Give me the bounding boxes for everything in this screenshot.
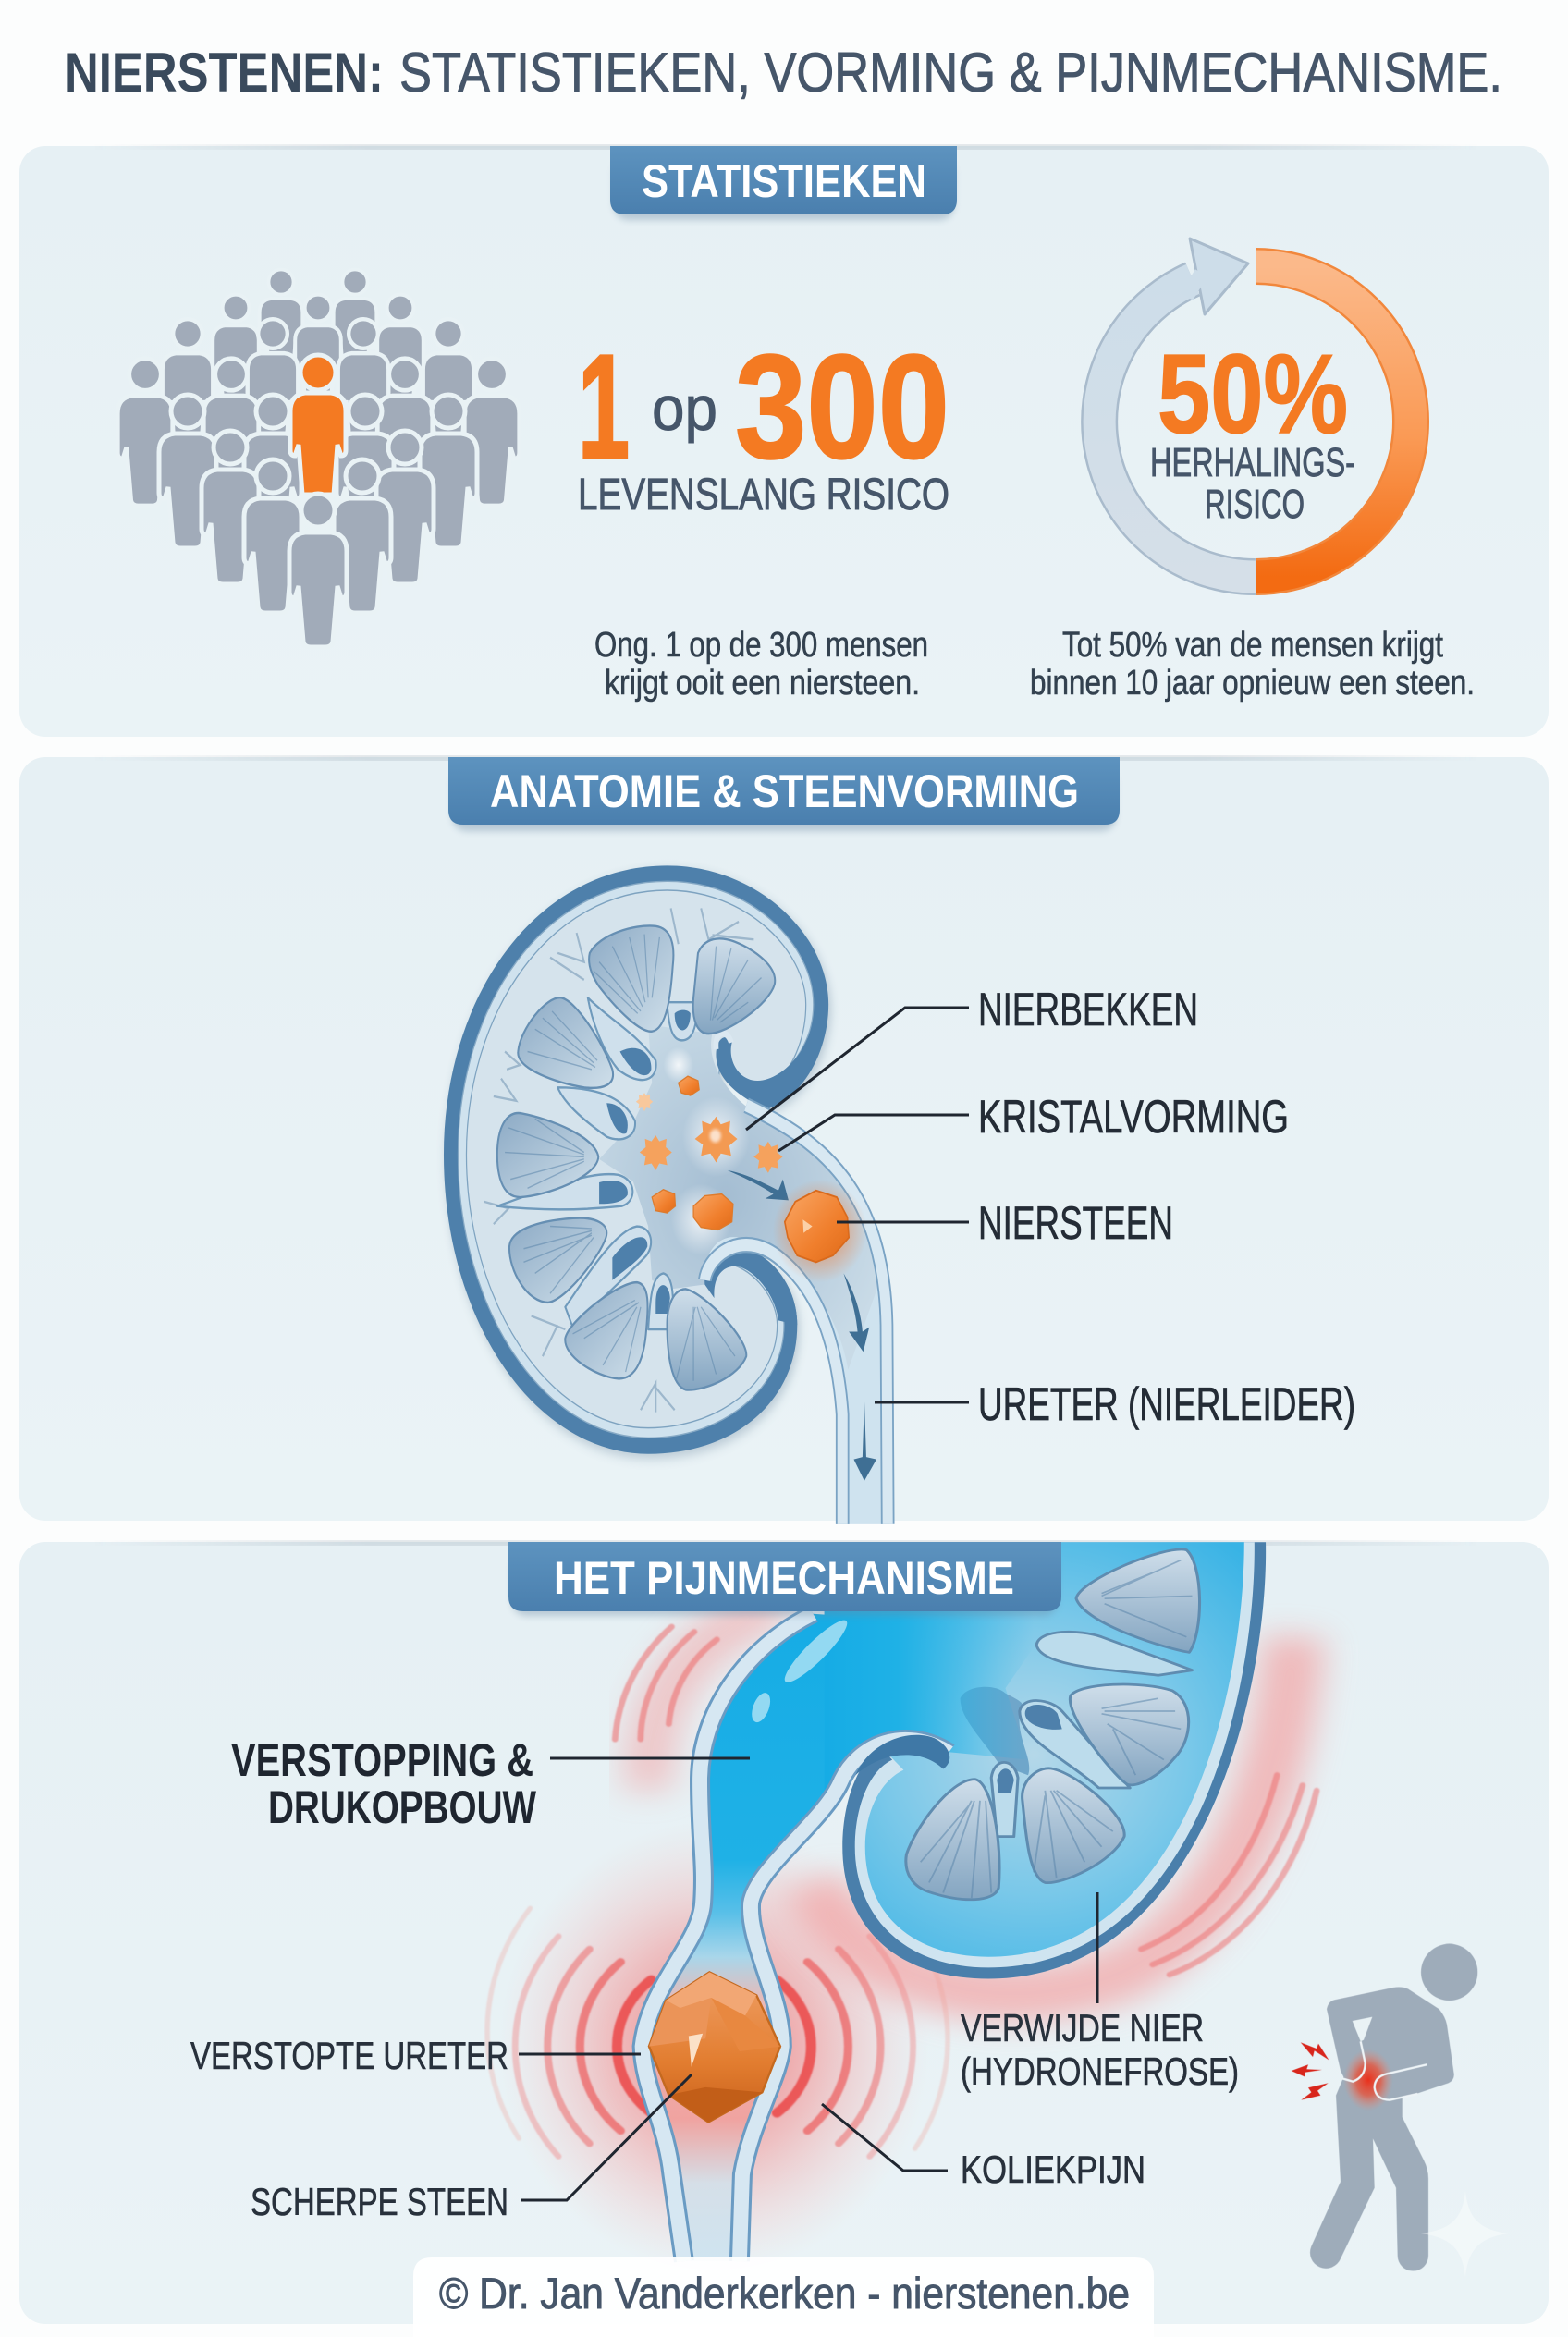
text: 50% description bbox=[1030, 626, 1475, 703]
text: 1 op 300 description: krijgt ooit een niersteen. bbox=[605, 664, 920, 703]
badge: het pijnmechanisme: HET PIJNMECHANISME bbox=[554, 1552, 1014, 1604]
label: scherpe steen bbox=[251, 2074, 692, 2223]
statistic: 1 op 300: 300 bbox=[735, 324, 949, 489]
pyramids bbox=[497, 925, 775, 1390]
icon: crowd of people with one highlighted bbox=[117, 270, 520, 647]
badge: statistieken bbox=[610, 146, 957, 220]
calyx dark tips bbox=[599, 1010, 691, 1314]
footer credit bbox=[413, 2257, 1154, 2337]
kidney capsule bbox=[444, 865, 828, 1454]
label: verstopping en drukopbouw: VERSTOPPING & bbox=[231, 1734, 533, 1786]
statistic: 1 op 300: 1 bbox=[578, 324, 630, 489]
label: verstopte ureter: VERSTOPTE URETER bbox=[190, 2034, 508, 2077]
footer credit: © Dr. Jan Vanderkerken - nierstenen.be bbox=[439, 2269, 1130, 2318]
swollen kidney bbox=[825, 1542, 1266, 1979]
red pain glow bbox=[499, 1601, 1294, 2271]
label: verwijde nier: (HYDRONEFROSE) bbox=[961, 2049, 1239, 2093]
label: scherpe steen: SCHERPE STEEN bbox=[251, 2180, 508, 2223]
text: 1 op 300 description bbox=[594, 626, 928, 703]
renal pelvis bbox=[599, 1024, 880, 1370]
label: verstopping en drukopbouw: DRUKOPBOUW bbox=[268, 1781, 537, 1833]
label: koliekpijn: KOLIEKPIJN bbox=[961, 2147, 1145, 2191]
ureter tube bbox=[708, 1106, 889, 1524]
statistic: 1 op 300: op bbox=[652, 373, 717, 444]
arrows bbox=[728, 1170, 876, 1481]
calyx dark tips bbox=[997, 1705, 1062, 1793]
label: nierbekken bbox=[746, 984, 1198, 1130]
label: kristalvorming: KRISTALVORMING bbox=[978, 1091, 1289, 1143]
label: verwijde nier: VERWIJDE NIER bbox=[961, 2006, 1204, 2049]
badge: het pijnmechanisme bbox=[508, 1542, 1061, 1616]
statistic: 1 op 300 bbox=[578, 324, 949, 520]
label: niersteen: NIERSTEEN bbox=[978, 1197, 1173, 1249]
scherpe steen bbox=[649, 1972, 780, 2123]
chart: 50% recurrence ring with arrow: HERHALINGS- bbox=[1150, 440, 1355, 485]
illustration: blocked ureter and swollen kidney bbox=[487, 1542, 1317, 2271]
icon: person in pain bbox=[1292, 1944, 1509, 2277]
label: koliekpijn bbox=[822, 2104, 1145, 2191]
ureter walls bbox=[704, 1034, 888, 1524]
calyces bbox=[991, 1632, 1192, 1837]
pain arcs bbox=[487, 1627, 1317, 2157]
label: nierbekken: NIERBEKKEN bbox=[978, 984, 1198, 1035]
chart: 50% recurrence ring with arrow bbox=[1099, 239, 1411, 577]
crystals and stones bbox=[636, 1047, 782, 1255]
text: 50% description: Tot 50% van de mensen krijgt bbox=[1062, 626, 1443, 665]
vessels bbox=[484, 908, 753, 1413]
panel: statistieken bbox=[19, 145, 1549, 737]
badge: statistieken: STATISTIEKEN bbox=[642, 155, 926, 207]
calyx fingers bbox=[497, 997, 697, 1329]
label: verstopping en drukopbouw bbox=[231, 1734, 750, 1833]
badge: anatomie en steenvorming bbox=[448, 757, 1120, 831]
dark hilum crescents bbox=[716, 1037, 809, 1109]
label: ureter: URETER (NIERLEIDER) bbox=[978, 1378, 1355, 1430]
badge: anatomie en steenvorming: ANATOMIE & STEENVORMING bbox=[490, 765, 1079, 817]
illustration: kidney with stones bbox=[444, 865, 889, 1524]
pyramids bbox=[906, 1549, 1200, 1900]
chart: 50% recurrence ring with arrow: RISICO bbox=[1205, 482, 1305, 527]
dilated pelvis bbox=[961, 1687, 1029, 1775]
panel: anatomie en steenvorming bbox=[19, 756, 1549, 1524]
text: 50% description: binnen 10 jaar opnieuw een steen. bbox=[1030, 664, 1475, 703]
ureter and dilated pelvis bbox=[643, 1607, 1062, 2261]
label: verwijde nier bbox=[961, 1892, 1239, 2093]
statistic: 1 op 300: LEVENSLANG RISICO bbox=[578, 471, 949, 520]
chart: 50% recurrence ring with arrow: 50% bbox=[1158, 331, 1348, 457]
text: 1 op 300 description: Ong. 1 op de 300 mensen bbox=[594, 626, 928, 665]
decorative sparkle watermark bbox=[1421, 2191, 1509, 2277]
label: kristalvorming bbox=[778, 1091, 1289, 1151]
niersteen bbox=[773, 1180, 867, 1282]
title: NIERSTENEN: bbox=[65, 42, 384, 104]
panel: het pijnmechanisme bbox=[19, 1541, 1549, 2324]
